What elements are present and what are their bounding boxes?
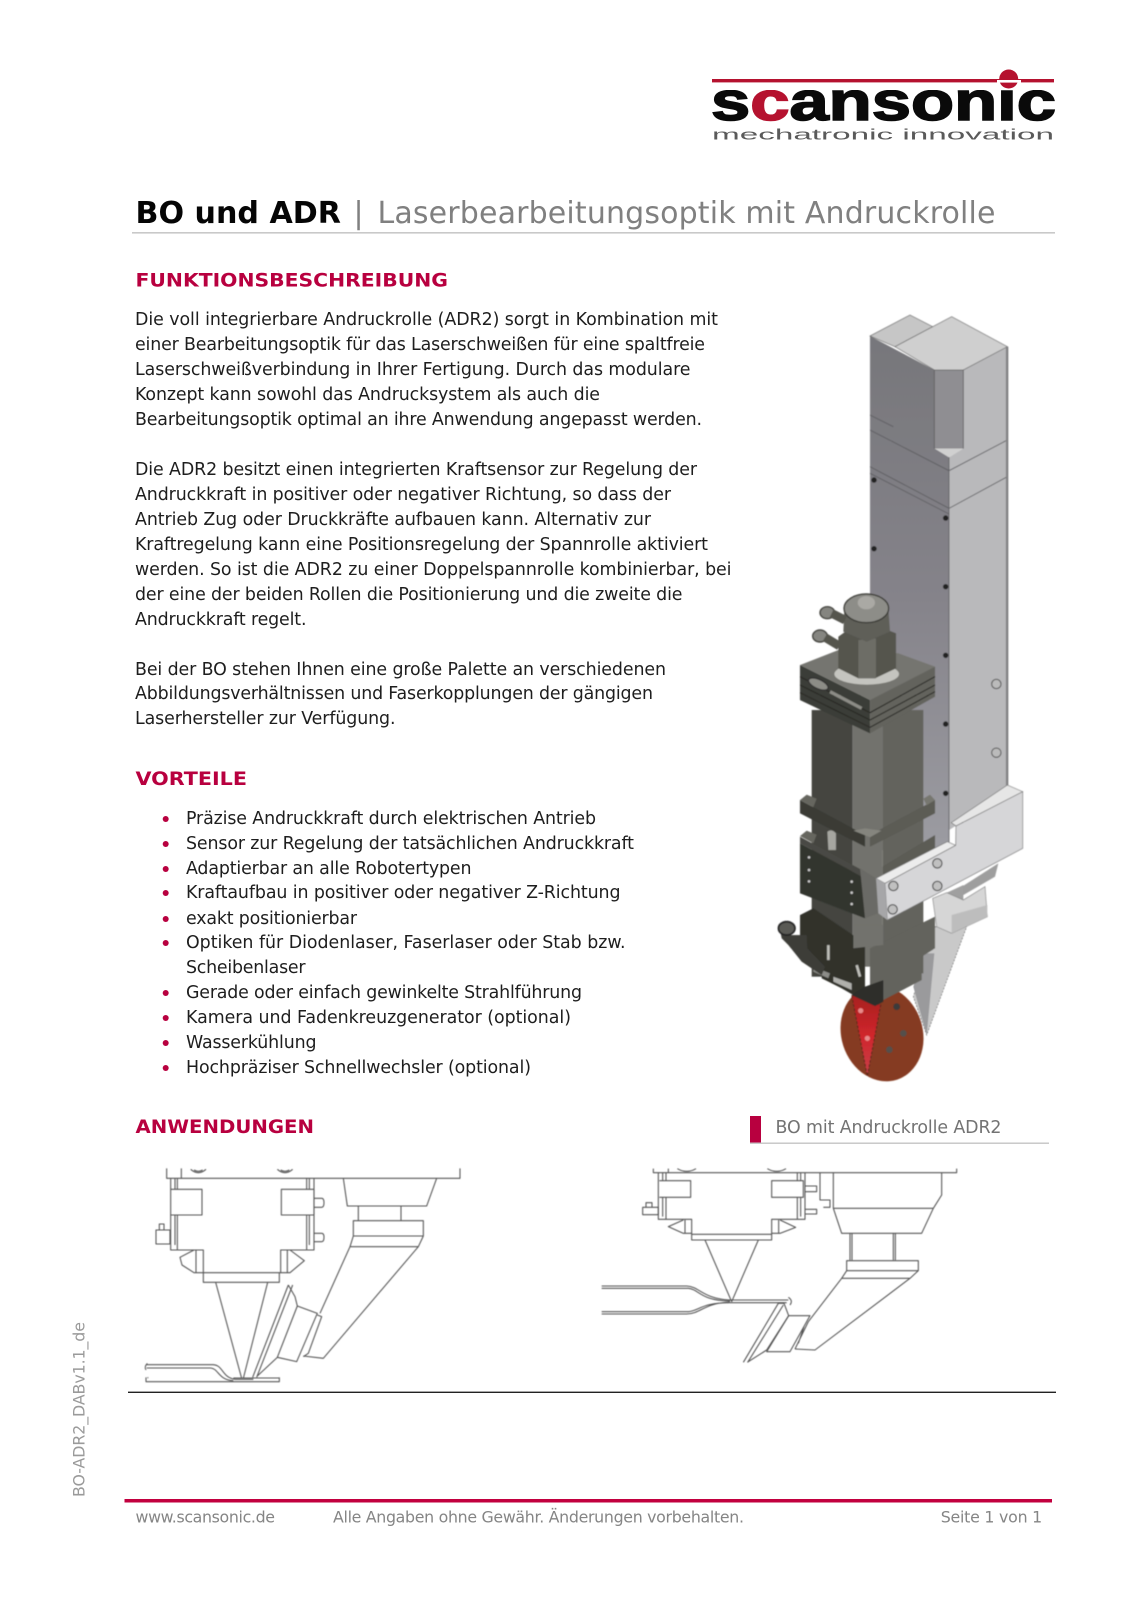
- text block: Funktionsbeschreibung paragraph 1: einer Bearbeitungsoptik für das Laserschweißen für eine spaltfreie: [135, 335, 705, 355]
- column left face: [870, 336, 949, 850]
- text block: Funktionsbeschreibung paragraph 3: Abbildungsverhältnissen und Faserkopplungen der gängigen: [135, 684, 653, 704]
- text block: Funktionsbeschreibung paragraph 3: Laserhersteller zur Verfügung.: [135, 709, 396, 729]
- text block: Funktionsbeschreibung paragraph 1: Bearbeitungsoptik optimal an ihre Anwendung angepasst werden.: [135, 410, 702, 430]
- text block: Funktionsbeschreibung paragraph 2: der eine der beiden Rollen die Positionierung und die zweite die: [135, 585, 682, 605]
- list: Vorteile: Sensor zur Regelung der tatsächlichen Andruckkraft: [186, 834, 634, 854]
- text block: Funktionsbeschreibung paragraph 1: Die voll integrierbare Andruckrolle (ADR2) sorgt in Kombination mit: [135, 310, 718, 330]
- list: Vorteile: Kraftaufbau in positiver oder negativer Z-Richtung: [186, 883, 620, 903]
- list: Vorteile: Gerade oder einfach gewinkelte Strahlführung: [186, 983, 582, 1003]
- text block: Funktionsbeschreibung paragraph 2: [135, 460, 732, 630]
- text block: Funktionsbeschreibung paragraph 2: Andruckkraft regelt.: [135, 610, 306, 630]
- title: [132, 196, 1055, 234]
- text block: Funktionsbeschreibung paragraph 2: Die ADR2 besitzt einen integrierten Kraftsensor zur Regelung der: [135, 460, 698, 480]
- list: Vorteile: [163, 809, 634, 1078]
- text block: Funktionsbeschreibung paragraph 1: Laserschweißverbindung in Ihrer Fertigung. Durch das modulare: [135, 360, 690, 380]
- image: BO with ADR2 pressure roller, machine illustration: [778, 315, 1023, 1092]
- logo: scansonic: mechatronic innovation: [712, 126, 1054, 144]
- document code, vertical: BO-ADR2_DABv1.1_de: [70, 1322, 90, 1497]
- column top faces: [870, 315, 1008, 850]
- caption: BO mit Andruckrolle ADR2: BO mit Andruckrolle ADR2: [776, 1118, 1002, 1138]
- footer: Alle Angaben ohne Gewähr. Änderungen vorbehalten.: [333, 1508, 744, 1527]
- optic top plate and fibre connector: [800, 594, 935, 733]
- list: Vorteile: Optiken für Diodenlaser, Faserlaser oder Stab bzw.: [186, 933, 626, 953]
- list: Vorteile: Adaptierbar an alle Robotertypen: [186, 859, 472, 879]
- heading: Vorteile: VORTEILE: [136, 768, 247, 790]
- text block: Funktionsbeschreibung paragraph 3: [135, 660, 666, 729]
- caption: BO mit Andruckrolle ADR2: [750, 1116, 1049, 1144]
- text block: Funktionsbeschreibung paragraph 2: Andruckkraft in positiver oder negativer Richtung, so dass der: [135, 485, 672, 505]
- list: Vorteile: Hochpräziser Schnellwechsler (optional): [186, 1058, 531, 1078]
- red pressure roller disc: [828, 974, 936, 1092]
- column right face: [949, 347, 1008, 830]
- heading: Funktionsbeschreibung: FUNKTIONSBESCHREIBUNG: [136, 270, 448, 292]
- list: Vorteile: Kamera und Fadenkreuzgenerator (optional): [186, 1008, 571, 1028]
- list: Vorteile: Scheibenlaser: [186, 958, 306, 978]
- text block: Funktionsbeschreibung paragraph 1: [135, 310, 718, 430]
- diagram: application, overlap joint: [145, 1168, 460, 1382]
- footer: Seite 1 von 1: [941, 1508, 1042, 1527]
- title: BO und ADR: [136, 196, 341, 231]
- optic flanges: [800, 795, 935, 918]
- list: Vorteile: exakt positionierbar: [186, 909, 358, 929]
- pressure roller support wedge: [913, 927, 967, 1035]
- logo: scansonic: scansonic: [711, 70, 1056, 132]
- text block: Funktionsbeschreibung paragraph 2: werden. So ist die ADR2 zu einer Doppelspannrolle kombinierbar, bei: [135, 560, 732, 580]
- baseline rule under diagrams: [128, 1392, 1056, 1393]
- mounting bracket: [876, 785, 1023, 920]
- diagram: application, fillet joint: [602, 1169, 957, 1362]
- column screws: [871, 477, 1001, 796]
- text block: Funktionsbeschreibung paragraph 3: Bei der BO stehen Ihnen eine große Palette an verschiedenen: [135, 660, 666, 680]
- footer: www.scansonic.de: [136, 1508, 275, 1527]
- logo: scansonic: [711, 70, 1056, 144]
- text block: Funktionsbeschreibung paragraph 2: Kraftregelung kann eine Positionsregelung der Spannrolle aktiviert: [135, 535, 708, 555]
- roller clamp under bracket: [933, 863, 998, 933]
- title: Laserbearbeitungsoptik mit Andruckrolle: [378, 196, 996, 231]
- text block: Funktionsbeschreibung paragraph 1: Konzept kann sowohl das Andrucksystem als auch die: [135, 385, 600, 405]
- footer: [124, 1499, 1052, 1527]
- text block: Funktionsbeschreibung paragraph 2: Antrieb Zug oder Druckkräfte aufbauen kann. Alternativ zur: [135, 510, 652, 530]
- heading: Anwendungen: ANWENDUNGEN: [136, 1116, 314, 1138]
- optic main housing: [812, 710, 923, 977]
- title: |: [354, 196, 364, 231]
- list: Vorteile: Präzise Andruckkraft durch elektrischen Antrieb: [186, 809, 596, 829]
- optic lower head: [778, 908, 935, 1006]
- list: Vorteile: Wasserkühlung: [186, 1033, 316, 1053]
